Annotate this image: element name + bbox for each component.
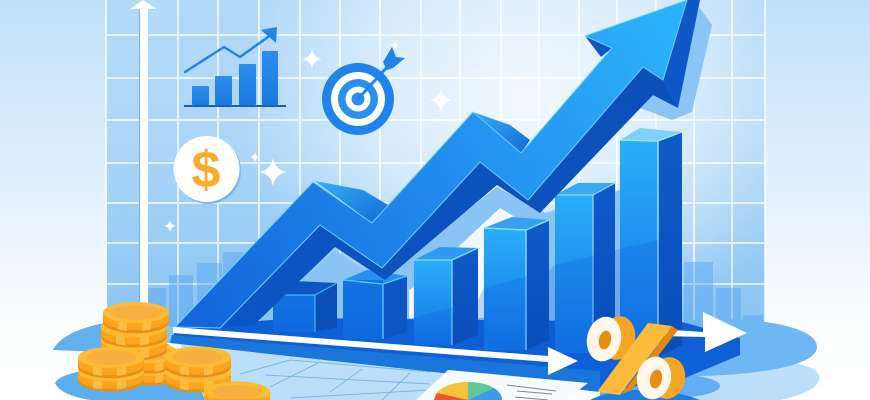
- percent base shadow: [590, 390, 700, 400]
- bar 5: [555, 183, 615, 353]
- sparkles: [164, 40, 452, 232]
- vertical axis arrow: [130, 0, 157, 306]
- arrow front face: [175, 0, 687, 328]
- left coin stack: [78, 347, 144, 392]
- bar 2: [343, 270, 407, 339]
- lower percent circle: [633, 353, 689, 400]
- arrow back faces: [315, 112, 530, 223]
- bar chart: [273, 128, 682, 357]
- arrow shadow: [528, 8, 712, 210]
- icon: dollar coin: $: [192, 141, 221, 199]
- pie chart: [434, 382, 502, 400]
- bar 1: [273, 281, 337, 332]
- bar 3: [414, 247, 478, 345]
- icon: small bar chart with trend arrow: [184, 27, 286, 107]
- bar 6: [620, 128, 682, 357]
- background grid panel: [106, 0, 765, 343]
- bar lower shading: [414, 235, 682, 357]
- floor puddles: [53, 319, 819, 400]
- right white arrow: [660, 312, 747, 352]
- back coin stack: [101, 302, 178, 386]
- horizontal axis arrow: [173, 327, 578, 375]
- platform floor: [170, 318, 740, 392]
- front coin: [203, 382, 271, 400]
- percent symbol 3D: [583, 313, 689, 400]
- bar 4: [484, 217, 549, 350]
- background faded bars: [148, 252, 763, 343]
- percent slash: [597, 323, 678, 395]
- interior backdrop under arrow: [262, 187, 620, 320]
- arrow side faces: [220, 0, 700, 328]
- icon: dollar coin: [174, 136, 241, 204]
- upper percent circle: [583, 313, 639, 365]
- coin stacks: [78, 302, 271, 400]
- icon: target with dart: [322, 47, 405, 135]
- floor data table: [180, 343, 600, 400]
- rising 3D arrow: [175, 0, 700, 328]
- right coin stack: [165, 346, 231, 392]
- document with pie chart: [416, 370, 588, 400]
